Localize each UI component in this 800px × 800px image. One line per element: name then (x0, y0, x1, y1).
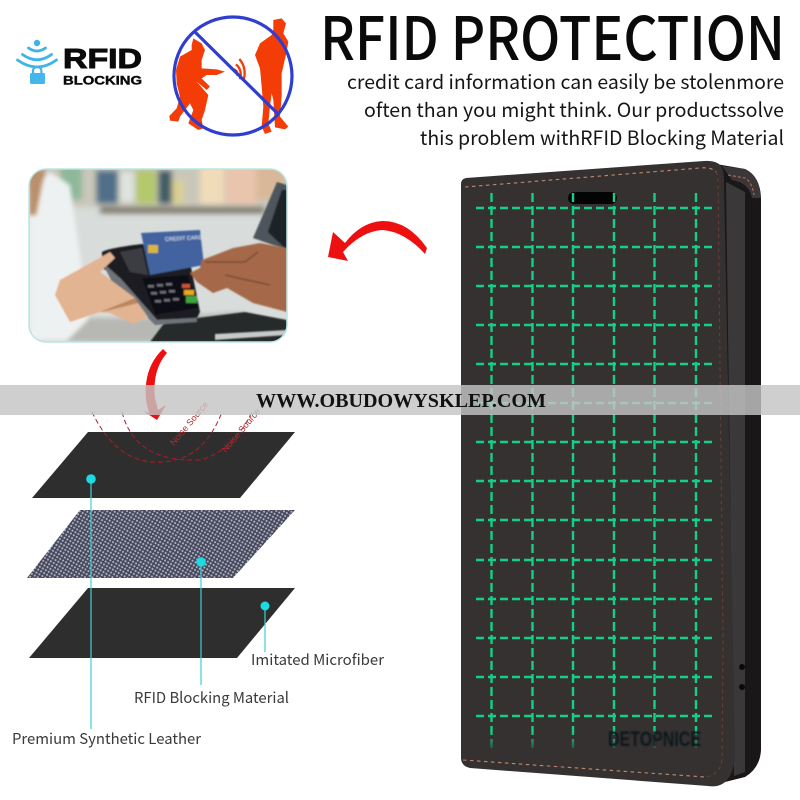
rf waves (92, 412, 252, 462)
green RF grid (476, 193, 712, 752)
callout: RFID blocking material (134, 557, 289, 708)
layer: microfiber (29, 588, 295, 658)
arrow: phone to photo (328, 221, 427, 261)
till screen (253, 182, 287, 250)
skimmer silhouette (169, 38, 225, 130)
callout: imitated microfiber: Imitated Microfiber (251, 649, 384, 670)
case front cover (461, 161, 735, 786)
top and bottom stitching (463, 168, 716, 777)
counter (66, 310, 242, 342)
left hand (55, 252, 148, 324)
arrow: photo to layers (143, 349, 167, 420)
speaker slot (568, 192, 617, 204)
brand mark: DETOPNICE (608, 728, 701, 751)
callout: RFID blocking material: RFID Blocking Material (134, 687, 289, 708)
panel: phone case (461, 161, 761, 786)
blurred shelf (29, 165, 289, 213)
layer: leather top: Noise Source (168, 399, 210, 447)
photo: card payment: CREDIT CARD (165, 235, 203, 243)
photo: card payment (29, 165, 289, 342)
side stitching (705, 172, 723, 777)
intro text: this problem withRFID Blocking Material (420, 122, 784, 151)
icon: no skimming sign (169, 17, 292, 135)
payment terminal (102, 244, 200, 320)
intro text: often than you might think. Our productssolve (364, 94, 784, 123)
prohibition ring (174, 17, 292, 135)
credit card (141, 230, 204, 275)
watermark text: WWW.OBUDOWYSKLEP.COM (256, 390, 546, 412)
callout: premium synthetic leather: Premium Synthetic Leather (12, 728, 201, 749)
layer: RFID blocking fabric (27, 510, 295, 578)
right hand (190, 243, 287, 312)
side buttons (739, 664, 745, 690)
shopkeeper shirt (29, 172, 92, 340)
icon: wifi lock (18, 40, 56, 84)
intro text (347, 66, 784, 151)
layer: leather top: Noise Source (220, 406, 262, 454)
bystander silhouette (255, 18, 288, 134)
logo wordmark: RFID (63, 43, 142, 74)
case spine (716, 164, 761, 782)
RFID blocking logo (18, 40, 142, 88)
intro text: credit card information can easily be stolenmore (347, 66, 784, 95)
callout: premium synthetic leather (12, 474, 201, 749)
layer: leather top (32, 399, 295, 498)
logo wordmark (63, 43, 142, 88)
logo wordmark: BLOCKING (63, 74, 142, 88)
callout: imitated microfiber (251, 602, 384, 670)
signal waves (234, 59, 245, 81)
watermark band (0, 385, 800, 415)
